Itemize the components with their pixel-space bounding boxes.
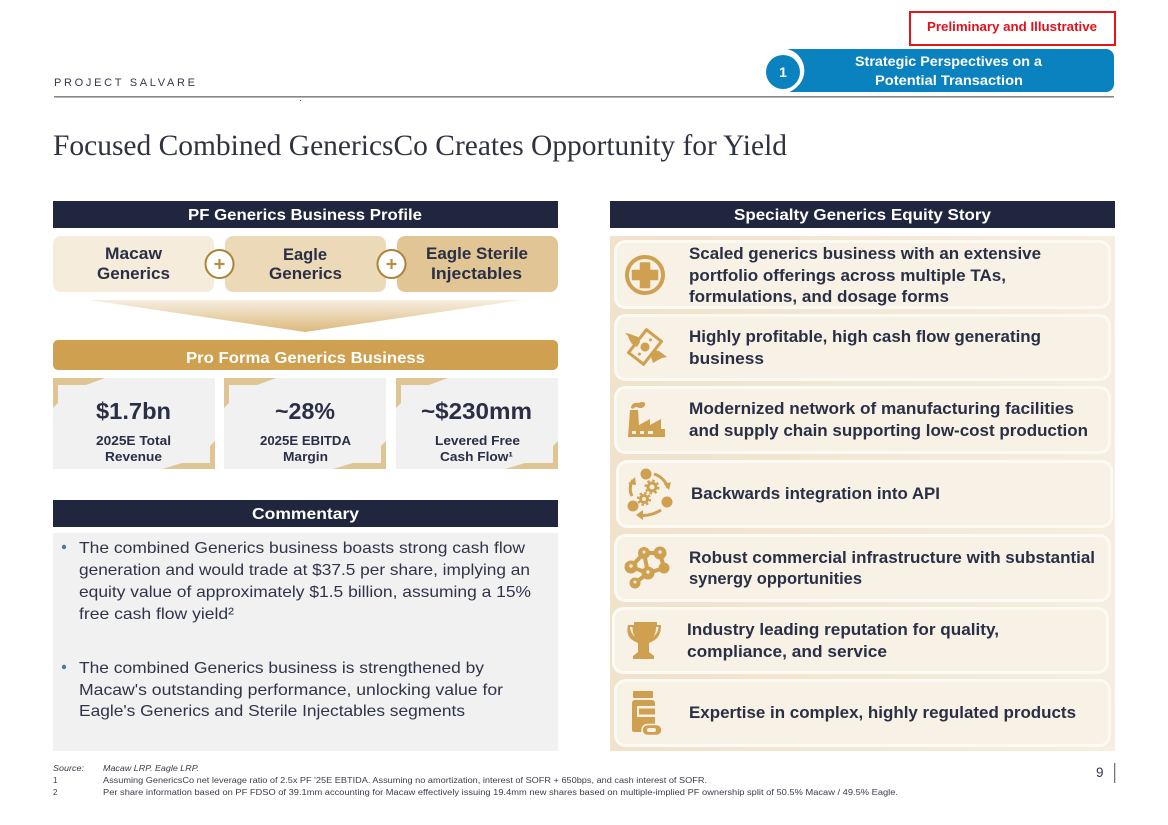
stat card: levered free cash flow: Cash Flow¹ [440, 449, 513, 464]
icon: factory [628, 402, 665, 437]
page number [1096, 763, 1115, 783]
icon: medicine bottle [632, 691, 662, 736]
stat card: levered free cash flow [396, 378, 558, 469]
card: scaled generics: Scaled generics business with an extensive [689, 245, 1041, 263]
card: robust commercial infrastructure [616, 536, 1110, 600]
stat card: revenue: $1.7bn [96, 398, 171, 424]
footnotes: 2 [53, 788, 58, 797]
box: Eagle Generics [225, 236, 386, 292]
box: Macaw Generics [53, 236, 214, 292]
text block: second bullet: Eagle's Generics and Sterile Injectables segments [79, 703, 465, 720]
text block: first bullet [62, 540, 531, 623]
stat card: levered free cash flow: Levered Free [435, 433, 520, 448]
banner: pro forma generics business: Pro Forma Generics Business [186, 350, 425, 367]
panel: specialty generics equity story [610, 201, 1115, 751]
card: scaled generics: formulations, and dosage forms [689, 288, 949, 306]
footnotes: Macaw LRP. Eagle LRP. [103, 764, 199, 773]
text block: first bullet: The combined Generics business boasts strong cash flow [79, 540, 525, 557]
panel: PF generics business profile [53, 201, 558, 469]
card: robust commercial infrastructure: synergy opportunities [689, 570, 862, 588]
stat card: revenue: 2025E Total [96, 433, 171, 448]
footnotes: Source: [53, 764, 84, 773]
section tracker: strategic perspectives [766, 49, 1114, 92]
icon: plus [378, 250, 406, 278]
stat card: EBITDA margin: Margin [283, 449, 328, 464]
text block: first bullet: free cash flow yield² [79, 606, 235, 623]
box: Eagle Sterile Injectables: Eagle Sterile [426, 245, 528, 263]
stat card: EBITDA margin: ~28% [275, 398, 335, 424]
box: Eagle Generics: Eagle [283, 246, 327, 264]
stat card: revenue [53, 378, 215, 469]
panel: commentary: Commentary [252, 506, 359, 523]
footnotes: 1 [53, 776, 58, 785]
header: project name: PROJECT SALVARE [54, 77, 195, 89]
icon: winged money [625, 328, 667, 366]
arrow: funnel [89, 300, 522, 332]
callout: preliminary and illustrative: Preliminary and Illustrative [927, 20, 1097, 34]
card: backwards integration: Backwards integration into API [691, 485, 940, 503]
box: Macaw Generics: Generics [97, 265, 170, 283]
icon: medical cross [627, 257, 663, 293]
icon: plus [206, 250, 234, 278]
callout: preliminary and illustrative [910, 12, 1115, 45]
card: highly profitable: Highly profitable, high cash flow generating [689, 328, 1041, 346]
card: robust commercial infrastructure: Robust commercial infrastructure with substantial [689, 549, 1095, 567]
text block: second bullet: Macaw's outstanding performance, unlocking value for [79, 682, 504, 699]
card: modernized network [616, 388, 1110, 452]
icon: integration cycle [628, 468, 672, 520]
card: industry leading reputation [614, 608, 1108, 672]
footnotes: Assuming GenericsCo net leverage ratio of 2.5x PF '25E EBTIDA. Assuming no amortization, interest of SOFR + 650bps, and cash interest of SOFR. [103, 776, 707, 785]
card: expertise in complex products: Expertise in complex, highly regulated products [689, 704, 1076, 722]
text block: first bullet: generation and would trade at $37.5 per share, implying an [79, 562, 530, 579]
card: highly profitable [616, 316, 1110, 380]
box: Eagle Generics: Generics [269, 265, 342, 283]
card: modernized network: and supply chain supporting low-cost production [689, 422, 1088, 440]
text block: second bullet: The combined Generics business is strengthened by [79, 660, 484, 677]
card: backwards integration [618, 462, 1112, 526]
box: Eagle Sterile Injectables: Injectables [431, 265, 522, 283]
card: scaled generics: portfolio offerings across multiple TAs, [689, 267, 1006, 285]
box: Macaw Generics: Macaw [105, 245, 162, 263]
card: expertise in complex products [616, 680, 1110, 746]
text block: second bullet [62, 660, 504, 720]
banner: pro forma generics business [53, 340, 558, 370]
card: industry leading reputation: compliance, and service [687, 643, 887, 661]
panel: commentary [53, 500, 558, 751]
panel: PF generics business profile: PF Generics Business Profile [188, 207, 422, 224]
section tracker: strategic perspectives: Potential Transaction [875, 73, 1023, 88]
section tracker: strategic perspectives: Strategic Perspectives on a [855, 54, 1043, 69]
stat card: revenue: Revenue [105, 449, 162, 464]
section tracker: strategic perspectives: 1 [779, 64, 787, 80]
footnotes [53, 764, 898, 797]
stat card: EBITDA margin: 2025E EBITDA [260, 433, 352, 448]
card: highly profitable: business [689, 350, 764, 368]
footnotes: Per share information based on PF FDSO of 39.1mm accounting for Macaw effectively issuing 19.4mm new shares based on multiple-implied PF ownership split of 50.5% Macaw / 49.5% Eagle. [103, 788, 898, 797]
card: modernized network: Modernized network of manufacturing facilities [689, 400, 1074, 418]
icon: trophy [627, 622, 661, 659]
card: scaled generics [616, 242, 1110, 308]
box: Eagle Sterile Injectables [397, 236, 558, 292]
card: industry leading reputation: Industry leading reputation for quality, [687, 621, 999, 639]
panel: specialty generics equity story: Specialty Generics Equity Story [734, 207, 991, 224]
page number: 9 [1096, 765, 1104, 780]
icon: people network [624, 546, 670, 588]
stat card: levered free cash flow: ~$230mm [421, 398, 532, 424]
text block: first bullet: equity value of approximately $1.5 billion, assuming a 15% [79, 584, 531, 601]
stat card: EBITDA margin [224, 378, 386, 469]
title: Focused Combined GenericsCo Creates Opportunity for Yield [53, 129, 787, 162]
